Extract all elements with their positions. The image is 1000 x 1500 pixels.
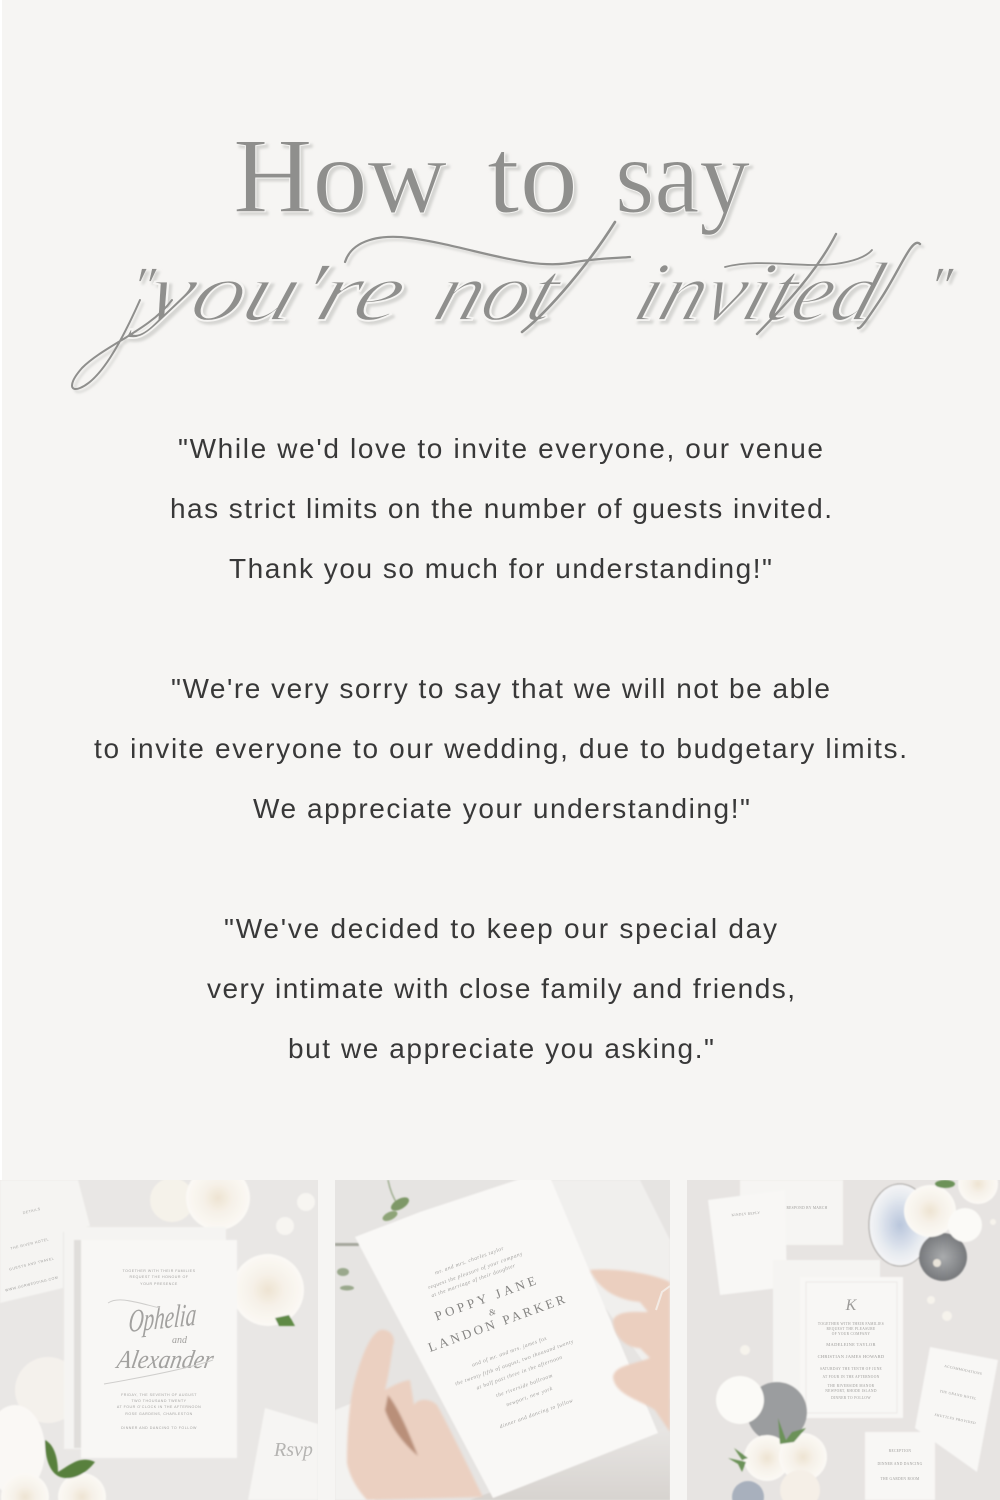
photo: flat lay invitation suite (687, 1164, 1000, 1500)
invitation wording: THE RIVER HOTEL (10, 1237, 49, 1251)
right hand fingers (590, 1270, 670, 1432)
card wording: THE GARDEN ROOM (880, 1477, 920, 1481)
couple names script: Rsvp (273, 1439, 313, 1461)
title: you're not invited script (72, 222, 957, 389)
invitation card (355, 1170, 658, 1498)
flowers at top of photo one (150, 1166, 315, 1326)
envelope (773, 1260, 880, 1405)
photo: calligraphy invitation suite (0, 1166, 318, 1500)
invitation names: LANDON PARKER (426, 1290, 570, 1355)
card wording: TOGETHER WITH THEIR FAMILIES (818, 1322, 884, 1326)
blue plate (869, 1184, 931, 1266)
invitation card (81, 1240, 237, 1458)
petals (740, 1219, 996, 1355)
invitation wording: WWW.OURWEDDING.COM (5, 1275, 59, 1293)
envelope behind invitation (64, 1227, 226, 1449)
couple names script: Ophelia (128, 1296, 198, 1339)
ring (656, 1286, 670, 1310)
title: you're not invited script: you're (124, 245, 419, 339)
invitation wording: FRIDAY, THE SEVENTH OF AUGUST (121, 1393, 197, 1397)
rsvp and details cards (708, 1180, 843, 1295)
card wording: KINDLY REPLY (731, 1211, 761, 1217)
title: you're not invited script: not (424, 245, 575, 339)
text block: venue limits: "While we'd love to invite everyone, our venue (178, 433, 823, 464)
invitation wording small (427, 1246, 575, 1430)
card wording: OF YOUR COMPANY (832, 1332, 870, 1336)
title: you're not invited script: " (126, 256, 160, 316)
card wording: THE GRAND HOTEL (939, 1389, 977, 1401)
text block: venue limits: has strict limits on the number of guests invited. (170, 493, 832, 524)
invitation wording: DINNER AND DANCING TO FOLLOW (121, 1426, 197, 1430)
left hand (347, 1330, 483, 1500)
card wording: ACCOMMODATIONS (944, 1364, 982, 1376)
card wording: REQUEST THE PLEASURE (826, 1327, 876, 1331)
couple names script (113, 1296, 313, 1461)
text block: budget limits: "We're very sorry to say that we will not be able (171, 673, 830, 704)
invitation wording: AT FOUR O'CLOCK IN THE AFTERNOON (117, 1405, 201, 1409)
text block: budget limits (94, 673, 907, 824)
title: you're not invited script: " (923, 256, 957, 316)
couple names script: Alexander (113, 1345, 217, 1374)
schedule card (915, 1347, 998, 1472)
card wording: CHRISTIAN JAMES HOWARD (818, 1354, 885, 1359)
rsvp card (248, 1408, 318, 1500)
white flowers lower left (716, 1376, 827, 1500)
text block: venue limits: Thank you so much for understanding!" (229, 553, 772, 584)
invitation wording small: the twenty fifth of august, two thousand twenty (454, 1338, 575, 1387)
invitation wording: ROSE GARDENS, CHARLESTON (125, 1412, 193, 1416)
card: details corner (0, 1180, 90, 1303)
text block: intimate day: very intimate with close family and friends, (207, 973, 795, 1004)
text block: intimate day (207, 913, 795, 1064)
lower left card (335, 1405, 366, 1500)
title: How to say (233, 118, 750, 236)
invitation wording small: at the marriage of their daughter (430, 1262, 517, 1299)
title: How to say: say (615, 118, 750, 236)
invitation names: & (487, 1306, 497, 1318)
invitation wording: YOUR PRESENCE (140, 1282, 178, 1286)
card wording: SATURDAY THE TENTH OF JUNE (820, 1367, 883, 1371)
slate dish (919, 1233, 967, 1281)
card wording: NEWPORT, RHODE ISLAND (825, 1389, 877, 1394)
monogram invitation (800, 1277, 903, 1418)
title: How to say: How (233, 118, 447, 236)
text block: budget limits: We appreciate your understanding!" (253, 793, 750, 824)
invitation wording: TOGETHER WITH THEIR FAMILIES (123, 1269, 196, 1273)
invitation wording small: and of mr. and mrs. james fox (471, 1335, 548, 1368)
invitation wording small: at half past three in the afternoon (475, 1354, 564, 1391)
invitation wording small: newport, new york (505, 1386, 554, 1408)
flowers bottom left (0, 1405, 106, 1500)
title: you're not invited script: invited (624, 245, 895, 339)
white flowers top right (904, 1180, 998, 1243)
invitation wording: DETAILS (22, 1207, 41, 1215)
reception card (865, 1432, 935, 1500)
text block: intimate day: "We've decided to keep our special day (224, 913, 777, 944)
card wording: DINNER AND DANCING (878, 1462, 923, 1466)
text block: intimate day: but we appreciate you asking." (288, 1033, 714, 1064)
invitation wording small: mr. and mrs. charles taylor (434, 1246, 505, 1276)
invitation wording: TWO THOUSAND TWENTY (131, 1399, 187, 1403)
card wording: RECEPTION (889, 1449, 911, 1453)
invitation wording small: the riverside ballroom (495, 1373, 554, 1399)
photo: hand holding invitation (335, 1170, 670, 1500)
card wording (731, 1206, 982, 1481)
invitation names: POPPY JANE (433, 1272, 541, 1323)
backdrop card (552, 1180, 670, 1360)
invitation wording small: request the pleasure of your company (427, 1250, 524, 1291)
wax seal (16, 1358, 64, 1422)
invitation wording: GUESTS AND TRAVEL (9, 1256, 55, 1272)
invitation wording (5, 1207, 201, 1430)
wax seal blue (732, 1481, 764, 1500)
title: How to say: to (487, 118, 578, 236)
finger gap (385, 1395, 418, 1456)
sprig of greenery (335, 1180, 411, 1290)
grey dish lower left (747, 1382, 807, 1442)
invitation wording small: dinner and dancing to follow (499, 1397, 574, 1430)
card wording: THE RIVERSIDE MANOR (828, 1384, 875, 1388)
monogram: K (845, 1297, 858, 1314)
card wording: AT FOUR IN THE AFTERNOON (823, 1375, 880, 1379)
card wording: SHUTTLES PROVIDED (934, 1413, 976, 1425)
card wording: RESPOND BY MARCH (786, 1206, 828, 1210)
card wording: DINNER TO FOLLOW (831, 1396, 871, 1400)
text block: venue limits (170, 433, 832, 584)
couple names script: and (172, 1335, 188, 1346)
card wording: MADELEINE TAYLOR (826, 1342, 876, 1347)
text block: budget limits: to invite everyone to our wedding, due to budgetary limits. (94, 733, 907, 764)
invitation wording: REQUEST THE HONOUR OF (130, 1275, 189, 1279)
